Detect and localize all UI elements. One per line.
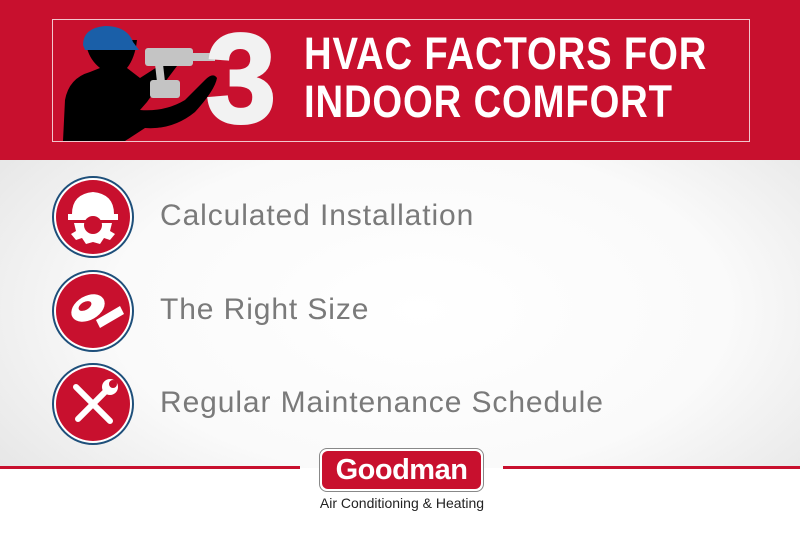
logo: Goodman	[319, 448, 484, 492]
label: Calculated Installation: Calculated Installation	[160, 199, 474, 232]
label: Regular Maintenance Schedule: Regular Maintenance Schedule	[160, 386, 604, 419]
tagline: Air Conditioning & Heating	[320, 495, 484, 511]
title: INDOOR COMFORT	[304, 76, 673, 127]
header banner	[0, 0, 800, 160]
illustration: worker with drill	[63, 26, 217, 141]
logo: Goodman: Goodman	[336, 454, 467, 486]
header frame	[52, 19, 750, 142]
label: The Right Size: The Right Size	[160, 293, 369, 326]
icon: hard hat gear	[52, 176, 134, 258]
title	[304, 28, 707, 127]
divider lines	[0, 466, 300, 469]
big number 3: 3	[206, 8, 276, 149]
title: HVAC FACTORS FOR	[304, 28, 707, 79]
icon: wrench and screwdriver	[52, 363, 134, 445]
icon: measuring tape	[52, 270, 134, 352]
background gradient area	[0, 160, 800, 468]
